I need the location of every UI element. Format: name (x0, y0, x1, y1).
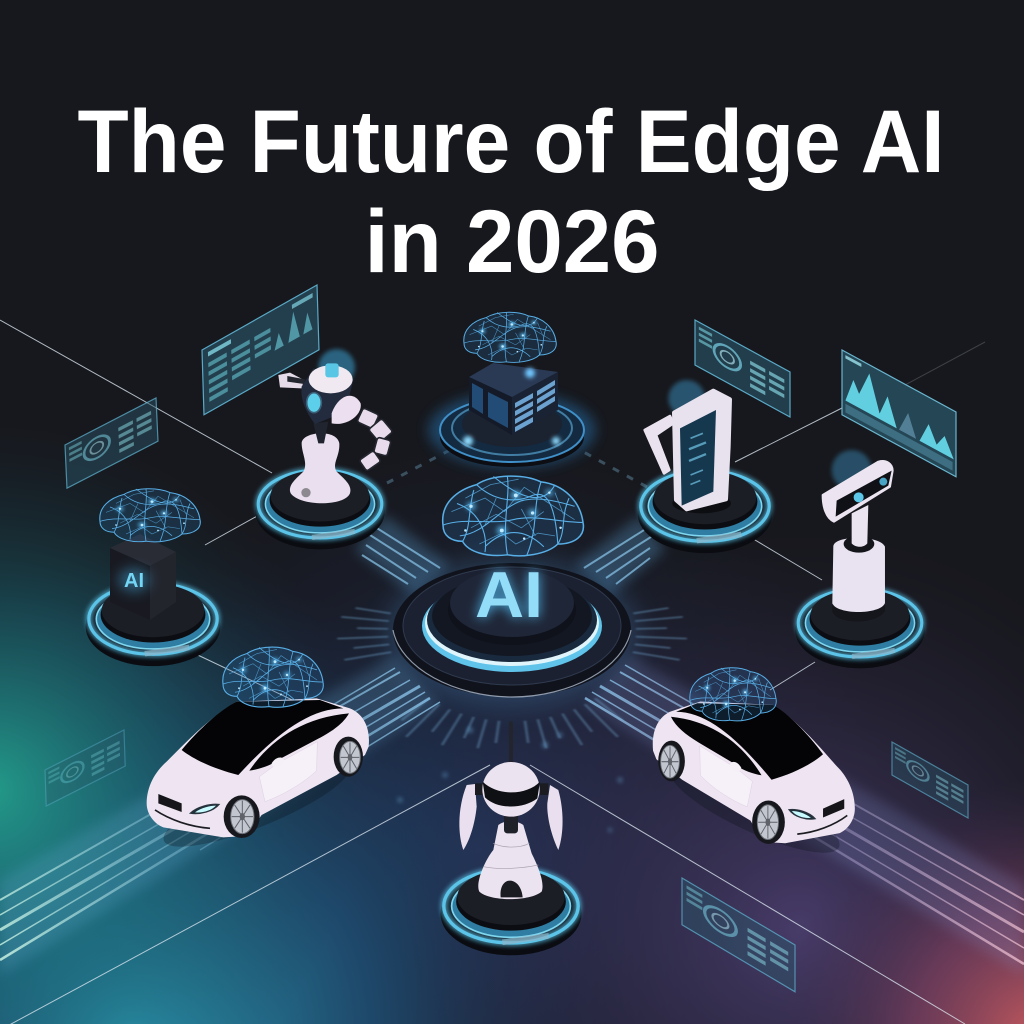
radial burst (337, 608, 687, 748)
hub disc (388, 560, 636, 704)
panel: dashboard far left (65, 398, 158, 488)
central hub (388, 476, 636, 704)
pedestal: device (638, 471, 772, 553)
panel: dashboard bottom right (682, 878, 795, 992)
car body left (147, 698, 369, 862)
car: left (147, 647, 369, 862)
beam: upper left (362, 525, 440, 584)
icon: central brain (443, 476, 583, 556)
dashed data trails (387, 450, 647, 487)
camera figure (823, 450, 893, 622)
node: AI chip cube (86, 489, 220, 666)
panel: dashboard lower right (892, 742, 968, 818)
light beams from central hub (0, 450, 1024, 975)
hub AI label glow: AI (475, 558, 543, 631)
car body right (653, 702, 855, 869)
pedestal: AI chip (86, 584, 220, 666)
beam: lower right (585, 665, 1024, 964)
title line 2: in 2026 (364, 191, 660, 291)
icon: brain above left car (223, 647, 323, 707)
device figure (645, 380, 731, 513)
node: camera sensor (795, 450, 925, 668)
icon: brain above AI cube (100, 489, 200, 542)
icon: server cube (469, 363, 558, 435)
beam: lower left (0, 668, 440, 960)
bottom robot figure (459, 723, 563, 899)
icon: brain above server (464, 312, 556, 362)
title line 1: The Future of Edge AI (78, 91, 944, 191)
panel: area chart top right (842, 350, 956, 477)
beam: upper right (584, 525, 654, 584)
node: robot arm (255, 349, 393, 549)
panel: dashboard lower left (45, 730, 125, 806)
pedestal: server (428, 392, 596, 468)
title (78, 91, 944, 291)
panel: dashboard top left (202, 285, 319, 415)
icon: brain above right car (690, 668, 776, 721)
node: bottom robot (440, 723, 582, 955)
bokeh lights (398, 727, 622, 832)
beam glow: lower right (585, 655, 1024, 975)
robot arm figure (278, 349, 393, 503)
hub AI label: AI (475, 558, 543, 631)
pedestal: robot arm (255, 470, 385, 549)
node: handheld device (638, 380, 772, 553)
connection lines (0, 320, 985, 1024)
AI label on cube: AI (124, 570, 144, 592)
panel: dashboard top right (695, 320, 790, 417)
node: server cube (428, 312, 596, 468)
icon: AI cube (110, 534, 176, 620)
pedestal: bottom robot (440, 869, 582, 955)
beam glow: upper right (575, 515, 665, 595)
beam glow: lower left (0, 655, 440, 975)
car: right (653, 668, 855, 869)
pedestal: camera (795, 589, 925, 668)
beam glow: upper left (355, 515, 450, 595)
